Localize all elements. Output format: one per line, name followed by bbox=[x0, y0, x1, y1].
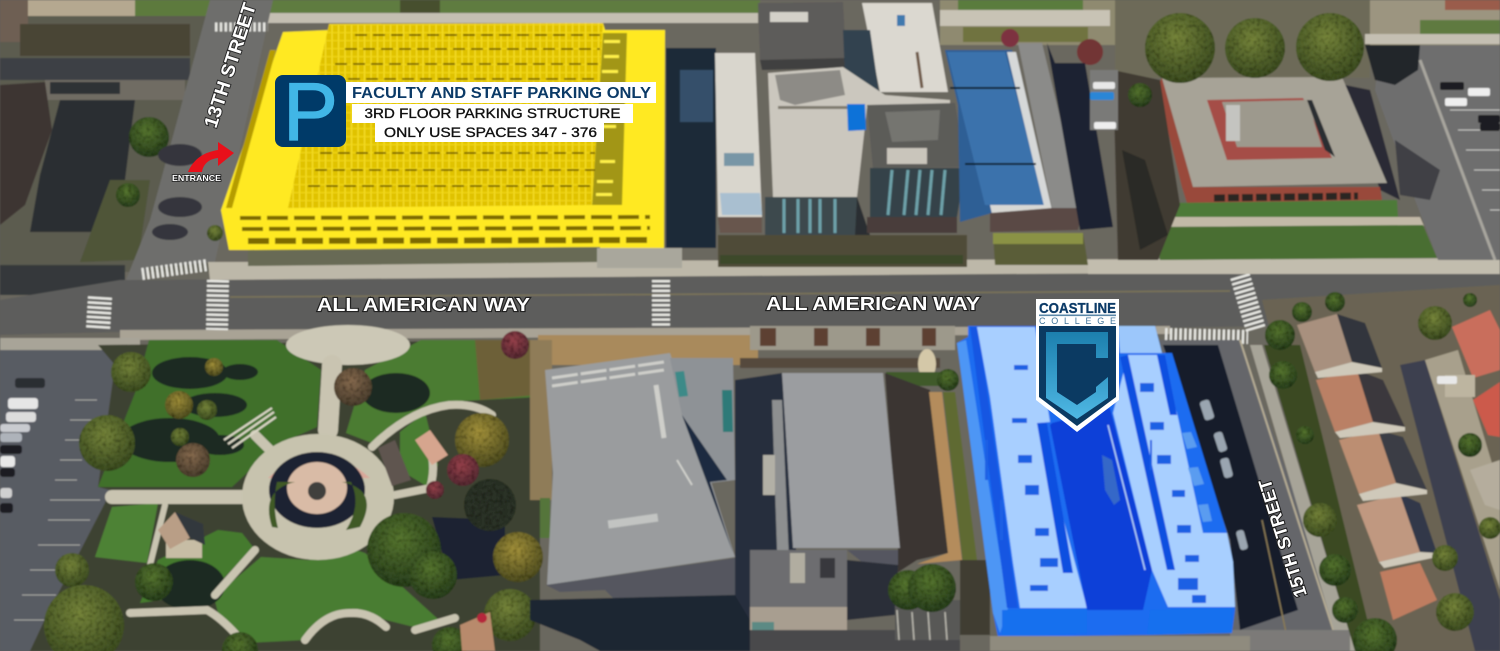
west parking lot south bbox=[0, 338, 140, 651]
facade with window rows bbox=[221, 210, 664, 250]
glass facade west bbox=[765, 197, 857, 235]
wordmark: College: COLLEGE bbox=[1039, 316, 1116, 326]
structure top deck stalls bbox=[288, 23, 603, 208]
east campus building bbox=[1090, 13, 1500, 265]
lawn northwest bbox=[98, 340, 321, 487]
tree near blue building bbox=[888, 369, 959, 612]
13th Street road bbox=[118, 0, 273, 300]
alley bbox=[1400, 360, 1500, 651]
west ramp wall bbox=[226, 50, 276, 208]
garden bed bbox=[378, 440, 411, 486]
arched windows bbox=[1214, 196, 1358, 198]
east ramp olive bay bbox=[592, 33, 627, 205]
south parking bbox=[750, 630, 960, 651]
HVAC yard bbox=[750, 550, 847, 607]
gazebo bbox=[158, 512, 205, 558]
parked cars west lot bbox=[0, 378, 45, 513]
park shadows bbox=[120, 357, 505, 610]
park trees bbox=[44, 331, 543, 651]
wordmark: Coastline: COASTLINE bbox=[1039, 301, 1116, 317]
residential trees bbox=[1265, 292, 1500, 651]
blue glass roof bbox=[945, 50, 1052, 222]
red roof courtyard bbox=[1207, 98, 1332, 160]
dark glass roof bbox=[666, 48, 716, 248]
north east roof piece bbox=[1118, 326, 1162, 353]
dark roof block bbox=[867, 103, 965, 168]
street trees along 13th Street bbox=[116, 117, 223, 241]
upper dark roof block bbox=[758, 2, 846, 60]
label: 15th street: 15TH STREET bbox=[1255, 476, 1311, 600]
Coastline College shield logo bbox=[1036, 299, 1119, 432]
north sidewalk bbox=[208, 258, 1500, 280]
park paths bbox=[112, 365, 492, 645]
bottom wall bbox=[1002, 608, 1087, 637]
lawn west bbox=[95, 503, 158, 563]
cars on 15th Street bbox=[1199, 399, 1248, 551]
crosswalks bbox=[98, 27, 1256, 337]
C emblem bbox=[1046, 332, 1108, 419]
label: only use spaces: ONLY USE SPACES 347 - 376 bbox=[384, 124, 597, 140]
glass facade east bbox=[870, 168, 965, 217]
icon: parking P badge: P bbox=[283, 67, 338, 158]
lawn east bbox=[400, 412, 438, 487]
label: faculty and staff parking only: FACULTY AND STAFF PARKING ONLY bbox=[352, 85, 652, 102]
label: 13th street: 13TH STREET bbox=[201, 0, 261, 131]
east sidewalk bbox=[1088, 260, 1500, 274]
faculty parking label bbox=[275, 67, 656, 158]
parking row north bbox=[750, 326, 955, 350]
shadows on 13th Street bbox=[152, 144, 202, 240]
road centre line bbox=[230, 291, 1230, 297]
central white roof bbox=[768, 67, 950, 197]
shadow east of long roof bbox=[1047, 43, 1113, 230]
blue Coastline College building bbox=[957, 326, 1235, 637]
lawn northeast bbox=[346, 340, 537, 443]
upper white roof bbox=[862, 3, 948, 92]
residential area east bbox=[1262, 285, 1500, 651]
south sidewalk bbox=[120, 326, 1170, 340]
label: all american way east: ALL AMERICAN WAY bbox=[766, 293, 981, 314]
flat roof bbox=[1162, 77, 1387, 187]
rooftop skylights bbox=[1182, 432, 1212, 522]
lawn southwest bbox=[140, 530, 253, 603]
shadow lot bbox=[885, 373, 948, 573]
building I roof bbox=[782, 373, 900, 548]
label: all american way west: ALL AMERICAN WAY bbox=[317, 294, 531, 315]
gray long roof bbox=[1018, 43, 1082, 208]
parking lot east bbox=[1375, 45, 1500, 265]
driveways bbox=[1425, 350, 1500, 590]
arrow: parking entrance bbox=[188, 142, 234, 172]
playground bbox=[460, 612, 495, 651]
shield bbox=[1039, 326, 1116, 426]
building H roof bbox=[545, 353, 735, 585]
pink terrace bbox=[415, 430, 448, 465]
sand and green strips bbox=[917, 392, 962, 564]
sidewalk south of blue building bbox=[990, 636, 1250, 651]
roadside hedge bbox=[1264, 345, 1375, 651]
parking stall lines bbox=[1450, 110, 1500, 210]
lawn strips bbox=[1168, 200, 1398, 217]
landscaping beds bbox=[718, 235, 967, 267]
sand strip bbox=[538, 335, 758, 365]
alley between buildings bbox=[735, 373, 800, 630]
townhouse roofs bbox=[1297, 314, 1437, 620]
hedges below yellow structure bbox=[248, 247, 600, 266]
pink houses bbox=[1452, 310, 1500, 378]
plaza steps bbox=[597, 248, 682, 268]
amphitheatre steps bbox=[224, 408, 276, 448]
central dark courtyard bbox=[1050, 408, 1152, 610]
white roof wing bbox=[715, 53, 762, 217]
east roof bbox=[1113, 355, 1235, 607]
west outer strip bbox=[957, 340, 1008, 633]
All American Way road bbox=[0, 270, 1500, 335]
parked cars bbox=[1440, 82, 1500, 131]
top lawn and sidewalk bbox=[268, 0, 1500, 78]
shaded bay bbox=[847, 560, 898, 620]
semicircle plaza bbox=[286, 325, 410, 365]
gray campus buildings bbox=[530, 326, 990, 651]
left yard with fence bbox=[1113, 70, 1180, 262]
top left neighbourhood bbox=[0, 0, 215, 295]
west dark stripe bbox=[970, 327, 1018, 608]
label: entrance: ENTRANCE bbox=[172, 173, 221, 183]
rooftop units bbox=[985, 365, 1206, 603]
yellow parking structure bbox=[221, 23, 665, 250]
deck aisle lines bbox=[308, 35, 600, 186]
fountain plaza bbox=[242, 434, 394, 560]
lawn south bbox=[214, 547, 439, 643]
blue tarp roof bbox=[847, 104, 866, 131]
roof stripes bbox=[1037, 423, 1073, 573]
brown brick facade bbox=[1157, 78, 1382, 203]
park bbox=[30, 325, 543, 651]
label: 3rd floor parking structure: 3RD FLOOR PARKING STRUCTURE bbox=[364, 105, 620, 121]
rounded trees bbox=[1128, 13, 1364, 107]
central campus buildings bbox=[666, 2, 1113, 267]
15th Street road bbox=[1150, 340, 1355, 651]
west roof bbox=[977, 327, 1087, 608]
shadow south of H bbox=[530, 595, 750, 651]
wing roof bbox=[670, 358, 735, 483]
